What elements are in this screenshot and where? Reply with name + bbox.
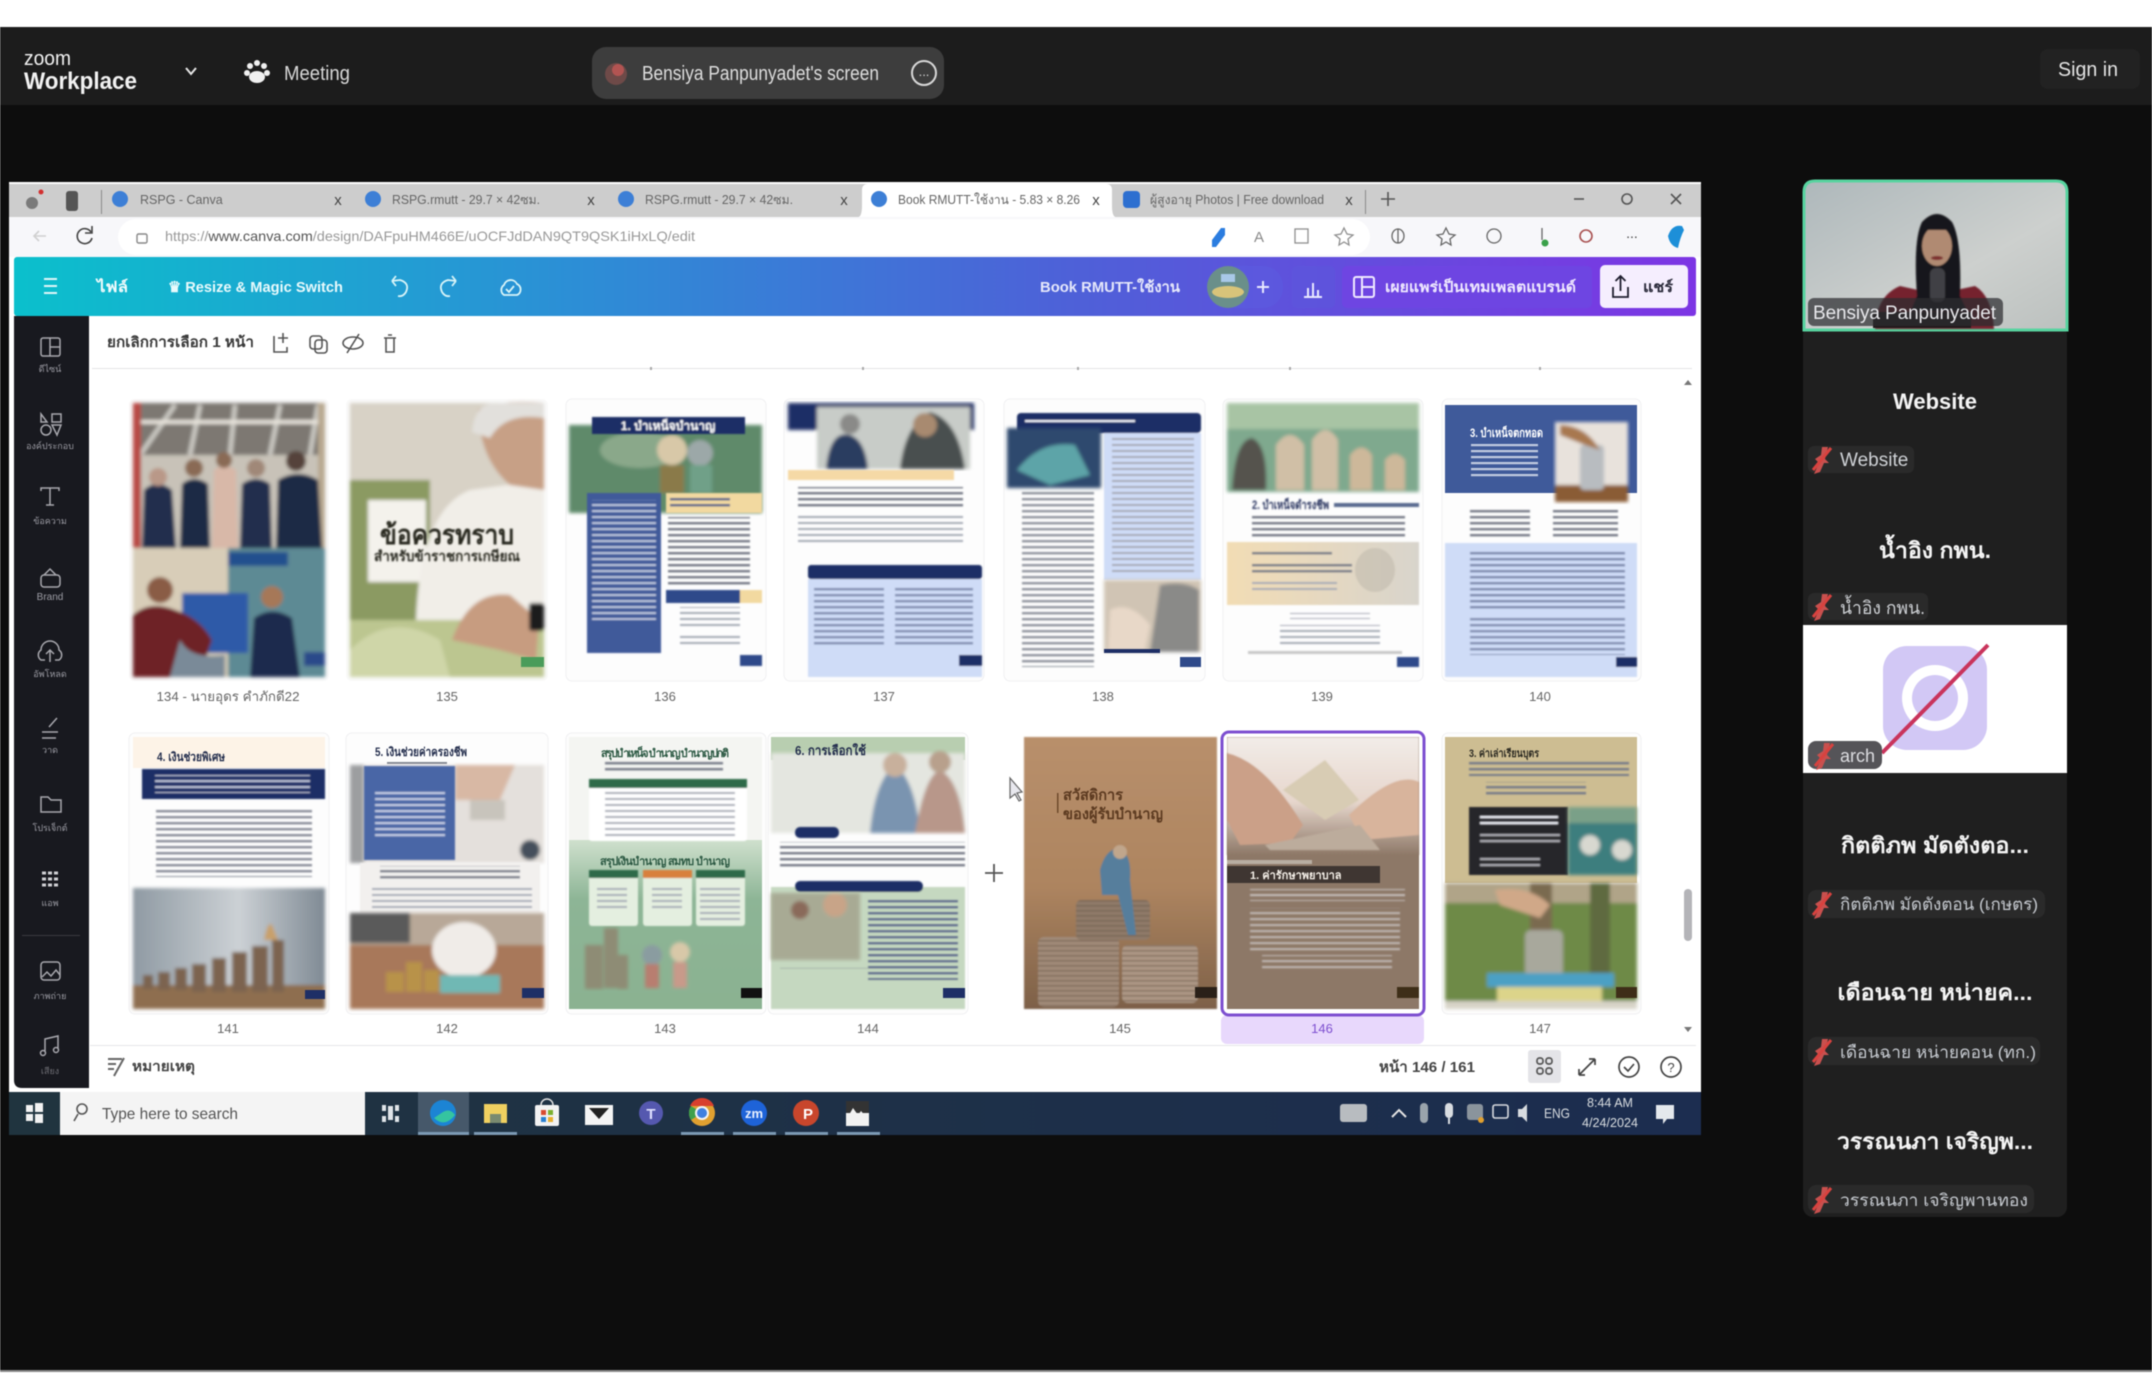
rail: projects: โปรเจ็กต์ [32,821,68,833]
row 2 page numbers: 141 [217,1021,239,1036]
thumbnail 139 [1223,399,1423,681]
thumbnail 134 [129,399,329,681]
bottom status bar [90,1045,1696,1083]
participant: arch camera tile [1803,625,2067,773]
thumbnail 135 title: ข้อควรทราบ [380,520,514,550]
page counter: หน้า 146 / 161 [1379,1059,1475,1076]
row 2 page numbers: 143 [654,1021,676,1036]
publish as brand template: เผยแพร่เป็นเทมเพลตแบรนด์ [1385,277,1576,296]
participant: nam-ing [1808,534,1991,621]
thumbnail 136 [566,399,766,681]
mail icon [585,1105,613,1125]
thumbnail 135 title: สำหรับข้าราชการเกษียณ [374,548,520,564]
page selection toolbar: ยกเลิกการเลือก 1 หน้า [107,334,254,351]
rail: uploads: อัพโหลด [33,669,67,679]
tab 2 [365,191,595,209]
thumbnail 145 title: สวัสดิการ [1063,786,1124,804]
thumbnail 141: 4. เงินช่วยพิเศษ [157,750,225,764]
browser toolbar icons: ... [1626,225,1638,241]
zoom workplace logo: Workplace [24,68,137,95]
rail: photos [34,962,66,1001]
file label: ไฟล์ [95,277,128,296]
explorer icon [484,1104,507,1123]
rail: apps [41,873,59,908]
thumbnail 145 [1024,737,1217,1009]
row 1 page numbers: 138 [1092,689,1114,704]
mouse cursor [1010,778,1022,801]
resize and magic switch: ♛ Resize & Magic Switch [168,279,343,296]
undo redo cloud [392,276,521,296]
menu icon [44,279,57,293]
rail: apps: แอพ [41,898,59,908]
address bar [9,217,1701,257]
tab 5 [1123,190,1366,214]
tab 2: x [587,192,595,209]
shared screen: browser window [9,182,1701,1135]
participant: wannapa: วรรณนภา เจริญพ... [1837,1129,2033,1155]
start button [26,1103,43,1123]
participant: arch camera tile: arch [1840,746,1875,766]
tab 1 [112,191,342,209]
row 2 page numbers [217,1021,1551,1036]
thumbnail 144: 6. การเลือกใช้ [795,742,866,758]
thumbnail 141 [129,733,329,1014]
rail: elements [26,414,74,451]
thumbnail 140: 3. บำเหน็จตกทอด [1470,425,1543,440]
row 1 page numbers: 134 - นายอุดร คำภักดี22 [156,689,300,705]
document title: Book RMUTT-ใช้งาน [1040,278,1181,296]
plus between pages [985,864,1003,882]
browser toolbar icons: A [1254,229,1264,246]
participant: kittiphop: กิตติภพ มัดตังตอ... [1841,833,2029,858]
thumbnail 143 [566,733,766,1014]
rail: design [39,338,61,374]
row 2 page numbers: 144 [857,1021,879,1036]
active tab: x [1092,192,1100,209]
rail: elements: องค์ประกอบ [26,440,74,451]
screen share pill: ... [919,64,929,79]
thumbnail 139 heading: 2. บำเหน็จดำรงชีพ [1252,497,1329,512]
speaker name tag: Bensiya Panpunyadet [1813,303,1997,324]
thumbnail 142 [346,733,548,1014]
powerpoint icon: P [803,1106,813,1123]
address bar: https://www.canva.com/design/DAFpuHM466E/uOCFJdDAN9QT9QSK1iHxLQ/edit [165,228,695,244]
expand check help icons: ? [1667,1060,1675,1075]
rail: text: ข้อความ [33,516,67,526]
running app indicators [418,1132,880,1135]
tab 3 [618,191,848,209]
system tray [1340,1095,1674,1130]
thumbnail 138 [1004,399,1205,681]
speaker video tile [1804,181,2067,330]
participant: kittiphop [1808,833,2045,919]
rail: brand: Brand [37,592,63,603]
participant: wannapa: วรรณนภา เจริญพานทอง [1840,1191,2028,1210]
system tray: 4/24/2024 [1582,1115,1638,1130]
row 1 page numbers: 140 [1529,689,1551,704]
share button: แชร์ [1643,278,1674,296]
participant: duenchai: เดือนฉาย หน่ายคอน (ทก.) [1840,1043,2036,1062]
rail: audio: เสียง [41,1066,59,1076]
row 1 page numbers [156,689,1551,705]
thumbnail 137 [784,399,984,681]
thumbnail 140 [1442,399,1641,681]
tab 1: x [334,192,342,209]
canva side rail [14,316,89,1088]
participant: nam-ing: น้ำอิง กพน. [1879,534,1991,563]
notes button [108,1058,195,1076]
thumbnail 135 title [374,520,520,564]
thumbnail 146 selected: 1. ค่ารักษาพยาบาล [1250,869,1342,882]
thumbnail 143: สรุปเงินบำนาญ สมทบ บำนาญ [600,855,730,869]
canva header bar [14,257,1696,316]
photos icon [846,1101,869,1126]
powerpoint icon [793,1100,819,1126]
active tab [858,184,1116,217]
window controls [1381,192,1681,206]
tab 2: RSPG.rmutt - 29.7 × 42ซม. [392,193,540,207]
sign in button: Sign in [2058,59,2118,81]
thumbnail 143: สรุปบำเหน็จ บำนาญ บำนาญปกติ [601,746,729,761]
participant: website [1808,389,1977,474]
teams icon [639,1101,663,1125]
meeting label: Meeting [284,63,350,85]
participant: duenchai: เดือนฉาย หน่ายค... [1838,980,2032,1005]
browser tab bar [9,184,1701,217]
thumbnail 142: 5. เงินช่วยค่าครองชีพ [375,745,467,759]
store icon [535,1099,559,1126]
rail: draw [42,718,58,755]
row 1 page numbers: 139 [1311,689,1333,704]
participant: kittiphop: กิตติภพ มัดตังตอน (เกษตร) [1840,895,2038,914]
participant: website: Website [1840,450,1908,471]
row 1 page numbers: 135 [436,689,458,704]
share button [1600,265,1688,308]
row 2 page numbers: 146 [1311,1021,1333,1036]
row 2 page numbers: 142 [436,1021,458,1036]
rail: draw: วาด [42,745,58,755]
grid view button [1528,1050,1561,1083]
row 1 page numbers: 136 [654,689,676,704]
zoom app icon: zm [745,1106,763,1121]
chrome icon [689,1098,715,1126]
windows taskbar [9,1092,1701,1135]
participants panel [1803,181,2067,1217]
thumbnail 147 [1442,733,1641,1014]
thumbnail 147: 3. ค่าเล่าเรียนบุตร [1469,747,1539,761]
zoom workplace logo: zoom [24,48,71,70]
thumbnail 144 [768,733,968,1014]
row 1 page numbers: 137 [873,689,895,704]
thumbnail 145 title [1063,786,1163,824]
system tray: ENG [1544,1105,1570,1121]
participant: website: Website [1893,389,1977,414]
notes button: หมายเหตุ [132,1058,195,1075]
rail: projects [32,797,68,833]
tab 3: x [840,192,848,209]
paw icon [244,60,270,83]
rail: text [33,488,67,526]
sign in button [2040,49,2140,89]
thumbnail 136: 1. บำเหน็จบำนาญ [621,418,715,433]
search box: Type here to search [102,1106,238,1123]
tab 5: x [1345,192,1353,209]
participant: nam-ing: น้ำอิง กพน. [1840,595,1925,618]
edge icon [418,1092,469,1135]
expand check help icons [1579,1057,1681,1077]
participant: duenchai [1808,980,2040,1066]
thumbnail 145 title: ของผู้รับบำนาญ [1063,806,1163,824]
screen share pill: Bensiya Panpunyadet's screen [642,63,879,85]
screen share pill [592,47,944,99]
rail: brand [37,569,63,603]
tab 3: RSPG.rmutt - 29.7 × 42ซม. [645,193,793,207]
avatar and add [1207,266,1283,308]
thumbnail 135 [346,399,548,681]
teams icon: T [646,1106,656,1123]
page selection toolbar [92,333,1692,370]
row 2 page numbers: 145 [1109,1021,1131,1036]
rail: photos: ภาพถ่าย [34,991,66,1001]
scrollbar [1684,380,1692,1032]
participant: wannapa [1808,1129,2034,1214]
chevron icon [186,68,196,74]
analytics button [1292,266,1335,308]
publish as brand template [1342,266,1592,308]
row 2 page numbers: 147 [1529,1021,1551,1036]
tab 5: ผู้สูงอายุ Photos | Free download [1150,193,1324,208]
tab 1: RSPG - Canva [140,193,223,207]
system tray: 8:44 AM [1587,1095,1633,1110]
active tab: Book RMUTT-ใช้งาน - 5.83 × 8.26 [898,193,1080,207]
task view icon [382,1105,399,1122]
rail: uploads [33,641,67,679]
rail: audio [40,1036,59,1076]
browser toolbar icons [1212,225,1684,248]
zoom app icon [741,1100,767,1126]
zoom workplace logo [24,48,137,95]
rail: design: ดีไซน์ [39,363,61,374]
zoom top bar [0,27,2152,105]
search box [60,1092,365,1135]
thumbnail 146 selected [1221,732,1424,1044]
